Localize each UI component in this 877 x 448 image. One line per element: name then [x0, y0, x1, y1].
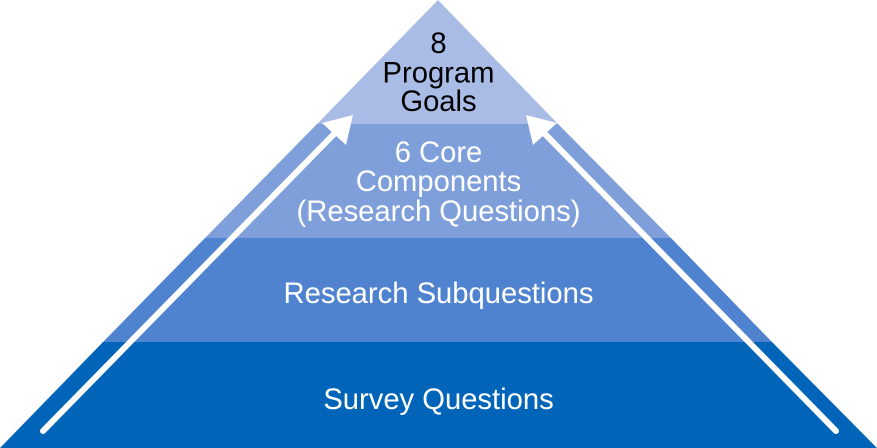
tier: research subquestions — [103, 238, 772, 342]
tier: 6 core components: (Research Questions) — [297, 196, 580, 228]
tier: 6 core components — [205, 124, 671, 238]
arrow: right upward — [526, 115, 836, 431]
tier: research subquestions: Research Subquestions — [284, 278, 593, 310]
tier: 8 program goals (top): Goals — [400, 86, 477, 118]
tier: 6 core components: Components — [356, 166, 521, 198]
tier: 8 program goals (top): 8 — [430, 28, 447, 60]
arrow: left upward — [43, 115, 353, 431]
tier: 6 core components: 6 Core — [395, 137, 482, 169]
tier: survey questions (base): Survey Questions — [323, 384, 554, 416]
tier: 8 program goals (top): Program — [383, 58, 494, 90]
tier: 8 program goals (top) — [317, 0, 558, 124]
tier: survey questions (base) — [0, 342, 877, 448]
